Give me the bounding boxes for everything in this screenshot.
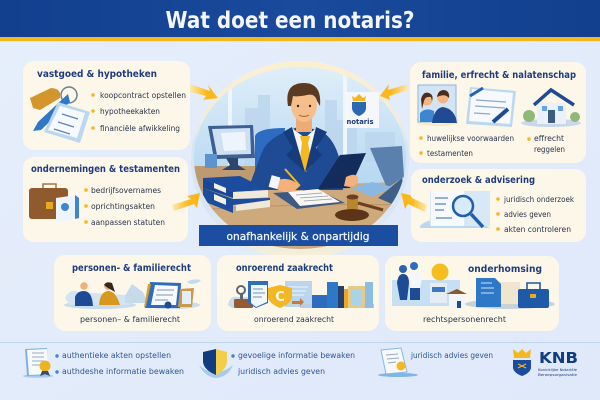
icon: stamp, certificate and shield: C	[275, 290, 285, 305]
logo: KNB: Koninklijke Notariële	[538, 367, 578, 372]
arrow: onderzoek to centre	[401, 193, 427, 212]
panel: personen- & familierecht	[54, 255, 211, 331]
list: ondernemingen: aanpassen statuten	[91, 218, 165, 227]
list: akten	[55, 351, 184, 376]
text: advies: juridisch advies geven	[410, 351, 493, 360]
icon: city buildings	[292, 282, 374, 308]
person body	[250, 126, 343, 190]
list: informatie	[231, 351, 355, 376]
icon: document and magnifier	[420, 191, 490, 228]
list: ondernemingen: bedrijfsovernames	[91, 186, 161, 195]
left monitor	[208, 125, 255, 170]
footer: informatie	[199, 349, 355, 378]
panel: vastgoed & hypotheken	[23, 61, 190, 150]
icon: certificate	[23, 348, 53, 378]
icon: documents and briefcase	[465, 278, 555, 309]
footer: akten	[23, 348, 184, 378]
binders	[203, 176, 270, 213]
caption: onderhomsing: rechtspersonenrecht	[423, 315, 506, 324]
icon: people and buildings	[392, 262, 467, 308]
footer: advies	[378, 348, 493, 377]
list: onderzoek: akten controleren	[504, 225, 571, 234]
icon: briefcase and document	[29, 184, 79, 222]
list: familie: effrecht	[534, 134, 564, 143]
title banner: Wat doet een notaris?	[166, 8, 414, 34]
icon: consultation	[64, 282, 148, 309]
heading: familie: familie, erfrecht & nalatenschap	[422, 70, 576, 81]
caption: onroerend: onroerend zaakrecht	[254, 315, 334, 324]
list: vastgoed	[91, 91, 186, 133]
heading: onderzoek: onderzoek & advisering	[422, 175, 535, 186]
hands and pen	[276, 179, 300, 193]
logo: KNB	[513, 349, 578, 377]
title banner	[0, 0, 600, 41]
list: familie: reggelen	[534, 145, 565, 154]
panel: onroerend zaakrecht	[217, 255, 379, 331]
head	[296, 118, 312, 132]
list: informatie: juridisch advies geven	[237, 367, 325, 376]
list: onderzoek: juridisch onderzoek	[503, 195, 574, 204]
panel: familie, erfrecht & nalatenschap	[410, 62, 586, 163]
desk	[190, 166, 255, 196]
panel: onderhomsing	[385, 256, 559, 331]
heading: personen: personen- & familierecht	[72, 263, 191, 274]
banner: onafhankelijk & onpartijdig: onafhankelijk & onpartijdig	[226, 230, 370, 243]
icon: document and frame	[144, 279, 201, 309]
list: akten: authentieke akten opstellen	[62, 351, 171, 360]
document on desk	[273, 190, 345, 209]
icon: couple	[416, 85, 458, 126]
arrow: vastgoed to centre	[190, 84, 218, 100]
notaris sign	[345, 92, 379, 128]
heading: ondernemingen: ondernemingen & testamenten	[31, 164, 180, 175]
list: onderzoek: advies geven	[504, 210, 551, 219]
list: akten: authdeshe informatie bewaken	[62, 367, 184, 376]
icon: certificate with seal	[378, 348, 418, 377]
icon: shield	[199, 349, 233, 378]
logo: KNB: KNB	[539, 349, 578, 367]
icon: house	[521, 90, 581, 127]
caption: personen: personen– & familierecht	[80, 315, 180, 324]
panel: ondernemingen & testamenten	[23, 157, 188, 242]
list: ondernemingen: oprichtingsakten	[91, 202, 155, 211]
icon: stamp, certificate and shield	[228, 281, 312, 308]
icon: keys and checklist	[30, 87, 90, 143]
heading: onderhomsing: onderhomsing	[468, 264, 542, 275]
list: familie: huwelijkse voorwaarden	[427, 134, 514, 143]
tablet	[318, 153, 366, 189]
list: familie	[419, 134, 565, 158]
central illustration: notary at desk	[190, 60, 410, 259]
notaris sign: notaris	[346, 118, 374, 126]
chair	[255, 128, 285, 170]
list: vastgoed: financiële afwikkeling	[100, 124, 180, 133]
list: informatie: gevoelige informatie bewaken	[238, 351, 355, 360]
right laptop	[370, 146, 404, 188]
gavel	[335, 194, 383, 221]
list: vastgoed: hypotheekakten	[100, 107, 160, 116]
panel: onderzoek & advisering	[411, 169, 586, 242]
banner: onafhankelijk & onpartijdig	[199, 225, 398, 246]
list: vastgoed: koopcontract opstellen	[100, 91, 186, 100]
list: ondernemingen	[84, 186, 165, 227]
list: onderzoek	[496, 195, 574, 234]
heading: onroerend: onroerend zaakrecht	[236, 263, 333, 274]
logo: KNB: Beroepsorganisatie	[538, 372, 578, 377]
footer divider	[0, 342, 600, 343]
heading: vastgoed: vastgoed & hypotheken	[37, 69, 157, 80]
arrow: familie to centre	[380, 84, 408, 100]
list: familie: testamenten	[427, 149, 473, 158]
icon: document and pen	[466, 87, 516, 127]
arrow: ondernemingen to centre	[172, 193, 200, 211]
